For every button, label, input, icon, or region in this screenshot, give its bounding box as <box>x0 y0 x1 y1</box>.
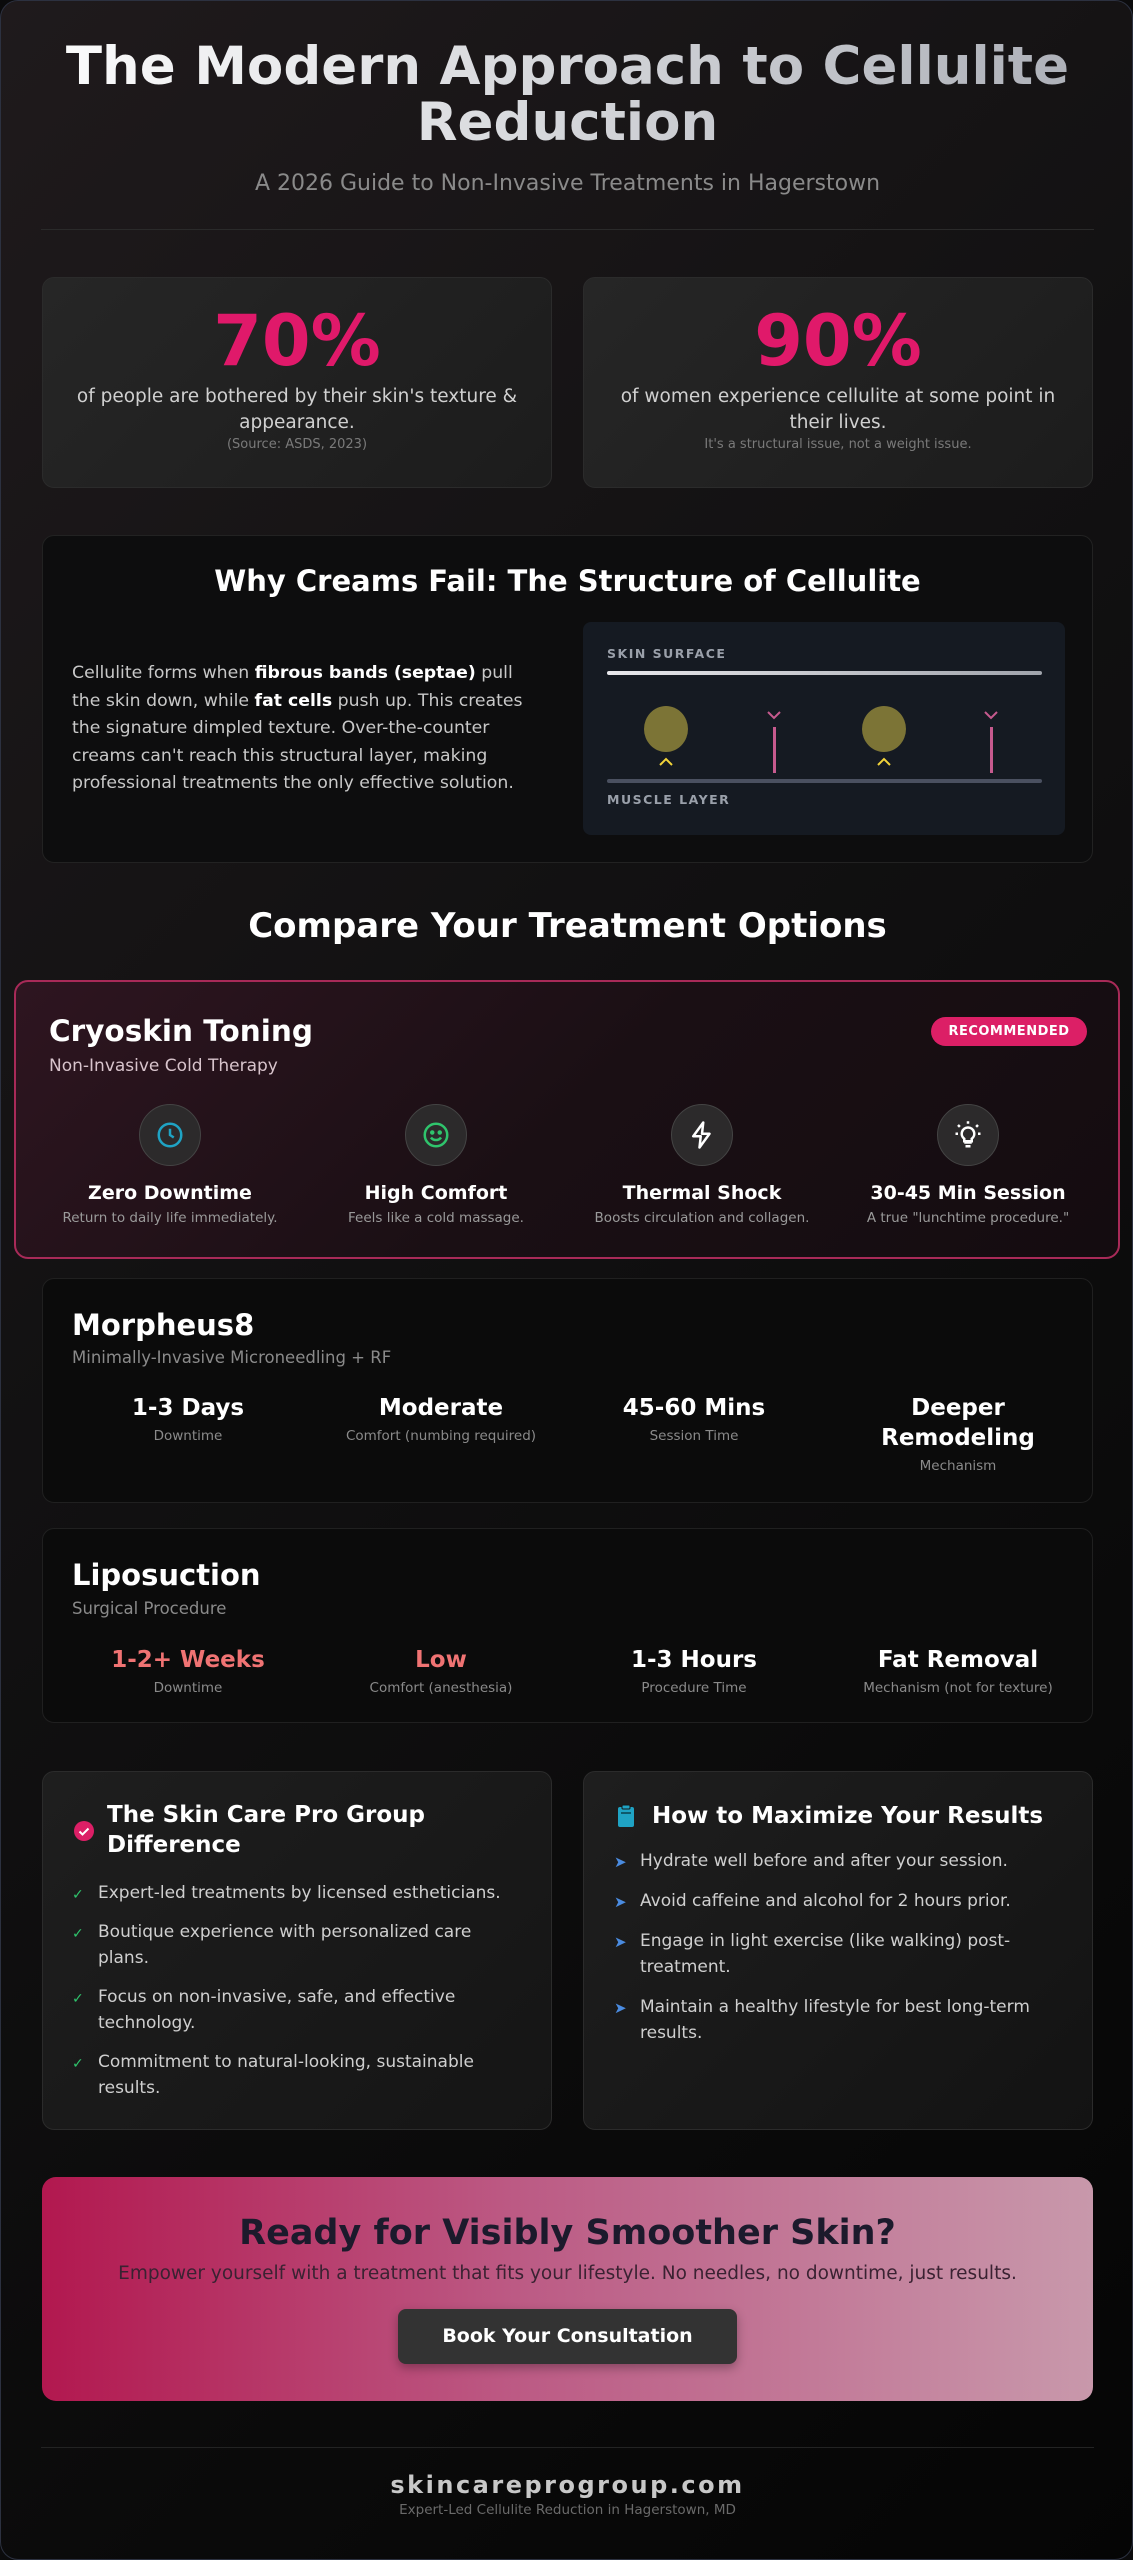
tips list: ➤ <box>614 1893 627 1911</box>
stat: mechanism: Remodeling <box>881 1425 1035 1451</box>
checklist: ✓ <box>72 2056 84 2072</box>
button: Book Your Consultation <box>442 2325 693 2347</box>
note: It's a structural issue, not a weight issue. <box>704 437 972 452</box>
stat: mechanism <box>881 1395 1035 1474</box>
stat: time: Procedure Time <box>641 1680 747 1696</box>
panel: why creams fail <box>42 535 1093 863</box>
footer: tagline: Expert-Led Cellulite Reduction in Hagerstown, MD <box>399 2502 736 2518</box>
stat: downtime: 1-3 Days <box>132 1395 244 1421</box>
icon: smile <box>405 1104 467 1166</box>
feature: session: A true "lunchtime procedure." <box>867 1210 1069 1226</box>
feature: zero downtime: Zero Downtime <box>88 1182 252 1204</box>
stat: downtime: Downtime <box>154 1428 222 1444</box>
checklist: Focus on non-invasive, safe, and effective technology. <box>98 1987 455 2033</box>
feature: high comfort: High Comfort <box>365 1182 507 1204</box>
panel: cryoskin <box>14 980 1120 1259</box>
heading: The Skin Care Pro Group Difference <box>107 1802 425 1858</box>
badge: RECOMMENDED <box>948 1024 1070 1039</box>
stat: comfort <box>370 1647 512 1696</box>
cta text: Empower yourself with a treatment that fits your lifestyle. No needles, no downtime, just results. <box>118 2263 1017 2284</box>
title: The Modern Approach to Cellulite <box>66 36 1069 97</box>
checklist: ✓ <box>72 1887 84 1903</box>
stat: comfort: Comfort (numbing required) <box>346 1428 536 1444</box>
tips list: ➤ <box>614 1853 627 1871</box>
stat: downtime <box>111 1647 265 1696</box>
tips list: Avoid caffeine and alcohol for 2 hours prior. <box>640 1891 1011 1911</box>
checklist: Expert-led treatments by licensed estheticians. <box>98 1883 501 1903</box>
panel: morpheus8 <box>42 1278 1093 1503</box>
stat: time: 1-3 Hours <box>631 1647 757 1673</box>
panel: liposuction <box>42 1528 1093 1723</box>
checklist <box>72 1883 501 2098</box>
checklist: Boutique experience with personalized care plans. <box>98 1922 471 1968</box>
source: (Source: ASDS, 2023) <box>227 437 367 452</box>
stat: comfort: Low <box>415 1647 467 1673</box>
feature: thermal shock <box>595 1104 809 1226</box>
title: Liposuction <box>72 1558 261 1592</box>
stat number 70%: 70% <box>213 300 381 382</box>
subtitle: Surgical Procedure <box>72 1599 226 1618</box>
panel: call to action <box>42 2177 1093 2401</box>
stat: mechanism: Fat Removal <box>878 1647 1038 1673</box>
title: Cryoskin Toning <box>49 1014 313 1048</box>
icon: bulb <box>937 1104 999 1166</box>
stat description: of people are bothered by their skin's texture & appearance. <box>77 386 517 433</box>
heading: Why Creams Fail: The Structure of Cellulite <box>214 564 921 598</box>
stat: downtime <box>132 1395 244 1444</box>
fat cells and septae <box>644 706 998 773</box>
stat: downtime: Downtime <box>154 1680 222 1696</box>
stat: downtime: 1-2+ Weeks <box>111 1647 265 1673</box>
stat: mechanism: Mechanism <box>920 1458 996 1474</box>
stat: comfort: Comfort (anesthesia) <box>370 1680 512 1696</box>
checklist: ✓ <box>72 1991 84 2007</box>
subtitle: A 2026 Guide to Non-Invasive Treatments in Hagerstown <box>255 171 880 196</box>
stat number 90%: 90% <box>754 300 922 382</box>
heading: How to Maximize Your Results <box>652 1803 1043 1829</box>
panel: maximize results <box>583 1771 1093 2130</box>
stat: mechanism: Mechanism (not for texture) <box>863 1680 1053 1696</box>
title <box>1 39 1133 151</box>
button <box>398 2309 737 2364</box>
stat: mechanism: Deeper <box>911 1395 1005 1421</box>
title: Reduction <box>417 92 718 153</box>
feature: thermal shock: Boosts circulation and collagen. <box>595 1210 809 1226</box>
stat: comfort <box>346 1395 536 1444</box>
label: skin surface: SKIN SURFACE <box>607 646 726 661</box>
panel: difference <box>42 1771 552 2130</box>
icon: bolt <box>671 1104 733 1166</box>
badge <box>931 1017 1087 1046</box>
subtitle: Minimally-Invasive Microneedling + RF <box>72 1348 391 1367</box>
heading: compare: Compare Your Treatment Options <box>248 906 887 946</box>
tips list: ➤ <box>614 1933 627 1951</box>
checklist: Commitment to natural-looking, sustainable results. <box>98 2052 474 2098</box>
feature: high comfort <box>348 1104 524 1226</box>
feature: session: 30-45 Min Session <box>870 1182 1066 1204</box>
stat card: 70% <box>42 277 552 488</box>
stat card: 90% <box>583 277 1093 488</box>
tips list <box>614 1851 1030 2043</box>
title: Morpheus8 <box>72 1308 254 1342</box>
checklist: ✓ <box>72 1926 84 1942</box>
diagram: skin structure <box>583 622 1065 835</box>
subtitle: Non-Invasive Cold Therapy <box>49 1056 278 1076</box>
footer: domain: skincareprogroup.com <box>390 2471 745 2499</box>
stat: mechanism <box>863 1647 1053 1696</box>
tips list: Engage in light exercise (like walking) post-treatment. <box>640 1931 1010 1977</box>
stat description: of women experience cellulite at some point in their lives. <box>621 386 1055 433</box>
stat: comfort: Moderate <box>379 1395 503 1421</box>
cta heading: Ready for Visibly Smoother Skin? <box>239 2213 896 2253</box>
feature: zero downtime: Return to daily life immediately. <box>62 1210 278 1226</box>
stat: session: Session Time <box>650 1428 738 1444</box>
icon: clock <box>139 1104 201 1166</box>
icon: check badge <box>74 1821 94 1841</box>
feature: high comfort: Feels like a cold massage. <box>348 1210 524 1226</box>
label: muscle layer: MUSCLE LAYER <box>607 792 730 807</box>
icon: clipboard <box>618 1806 634 1827</box>
tips list: ➤ <box>614 1999 627 2017</box>
stat: session: 45-60 Mins <box>623 1395 765 1421</box>
feature: zero downtime <box>62 1104 278 1226</box>
tips list: Hydrate well before and after your session. <box>640 1851 1008 1871</box>
feature: thermal shock: Thermal Shock <box>623 1182 781 1204</box>
stat: time <box>631 1647 757 1696</box>
tips list: Maintain a healthy lifestyle for best long-term results. <box>640 1997 1030 2043</box>
paragraph: Cellulite forms when fibrous bands (septae) pull the skin down, while fat cells push up. This creates the signature dimpled texture. Over-the-counter creams can't reach this structural layer, making professional treatments the only effective solution. <box>72 663 523 793</box>
feature: session <box>867 1104 1069 1226</box>
stat: session <box>623 1395 765 1444</box>
